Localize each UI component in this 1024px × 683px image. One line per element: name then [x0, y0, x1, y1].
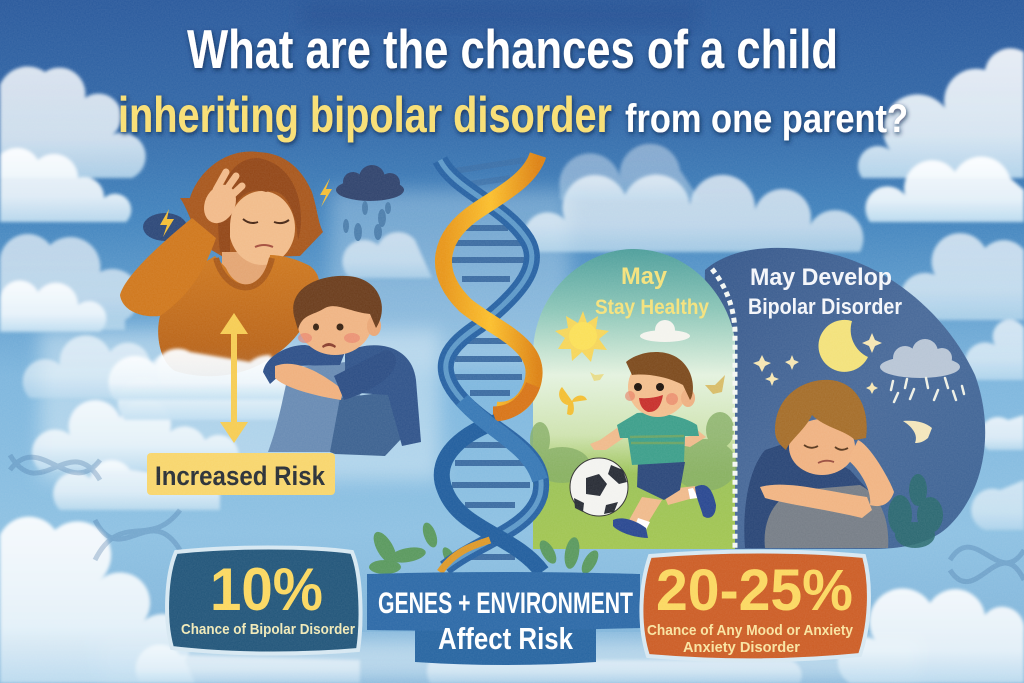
- plant: [888, 474, 943, 548]
- faint background DNA motifs: [10, 455, 1024, 582]
- banner: genes and environment: Affect Risk: [438, 621, 574, 656]
- icon: bird: [903, 421, 932, 443]
- panel: stressed mother: [120, 152, 323, 376]
- title: inheriting bipolar disorder: [118, 87, 612, 143]
- heading: may develop: Bipolar Disorder: [748, 294, 902, 319]
- child jeans: [268, 362, 360, 452]
- mother sweater: [158, 255, 319, 376]
- stat: 10 percent: 10%: [210, 556, 323, 623]
- panel: may develop bipolar disorder: [700, 248, 985, 549]
- child: sad boy: [744, 380, 894, 548]
- icon: rain cloud and lightning: [320, 165, 404, 241]
- child arm: [275, 364, 343, 400]
- dna strand blue upper: [440, 160, 541, 568]
- dna strand blue lower: [442, 422, 542, 572]
- child hoodie back: [345, 345, 421, 446]
- stat: 20 to 25 percent: Anxiety Disorder: [683, 639, 800, 656]
- mother face: [229, 191, 295, 265]
- mother collar: [216, 258, 272, 287]
- heading: may develop: May Develop: [750, 264, 892, 291]
- heading: may stay healthy: Stay Healthy: [595, 296, 709, 319]
- cloud under mother: [108, 349, 300, 400]
- heading: may stay healthy: [595, 263, 709, 319]
- leaves at base: [369, 521, 602, 576]
- dna strand gold: [443, 155, 538, 410]
- icon: stars: [753, 333, 882, 394]
- icon: small cloud: [640, 320, 690, 342]
- child head: [297, 285, 373, 355]
- bushes: [530, 412, 737, 491]
- mother raised arm: [120, 218, 216, 316]
- icon: sun: [555, 311, 609, 362]
- title: from one parent?: [625, 97, 908, 141]
- icon: night cloud with rain: [880, 339, 964, 402]
- heading: may stay healthy: May: [621, 263, 668, 290]
- icon: soccer ball: [570, 458, 628, 516]
- icon: small storm cloud with lightning: [143, 209, 187, 241]
- mother fringe: [218, 158, 301, 252]
- heading: may develop: [748, 264, 902, 319]
- child hair: [293, 276, 382, 330]
- stat: 20 to 25 percent: [641, 552, 869, 660]
- mother hair: [180, 152, 323, 258]
- arrow: increased risk: [220, 313, 248, 443]
- label: increased risk: [147, 453, 335, 495]
- icon: small butterflies: [590, 372, 725, 394]
- mother closed eyes and mouth: [243, 219, 289, 247]
- mother neck: [222, 252, 270, 288]
- child: playing boy: [590, 352, 716, 538]
- child face: [313, 324, 344, 348]
- mother hand on head: [198, 172, 242, 228]
- label: increased risk: Increased Risk: [155, 461, 326, 491]
- dna rungs: [448, 160, 530, 557]
- child sleeve: [263, 345, 345, 384]
- stat: 20 to 25 percent: Chance of Any Mood or Anxiety: [647, 622, 854, 639]
- divider between outcomes: [712, 269, 735, 549]
- dna strand crossing over: [462, 400, 540, 480]
- stat: 10 percent: [167, 548, 360, 654]
- stat: 10 percent: Chance of Bipolar Disorder: [181, 621, 355, 638]
- panel: sad child: [263, 276, 421, 456]
- title: What are the chances of a child: [187, 18, 838, 80]
- title: [118, 18, 908, 143]
- icon: butterfly: [559, 387, 587, 415]
- icon: moon: [818, 320, 868, 372]
- panel: may stay healthy: [530, 249, 737, 549]
- banner: genes and environment: [367, 572, 640, 665]
- banner: genes and environment: GENES + ENVIRONMENT: [378, 587, 633, 620]
- stat: 20 to 25 percent: 20-25%: [656, 558, 853, 623]
- dna helix: [440, 155, 542, 572]
